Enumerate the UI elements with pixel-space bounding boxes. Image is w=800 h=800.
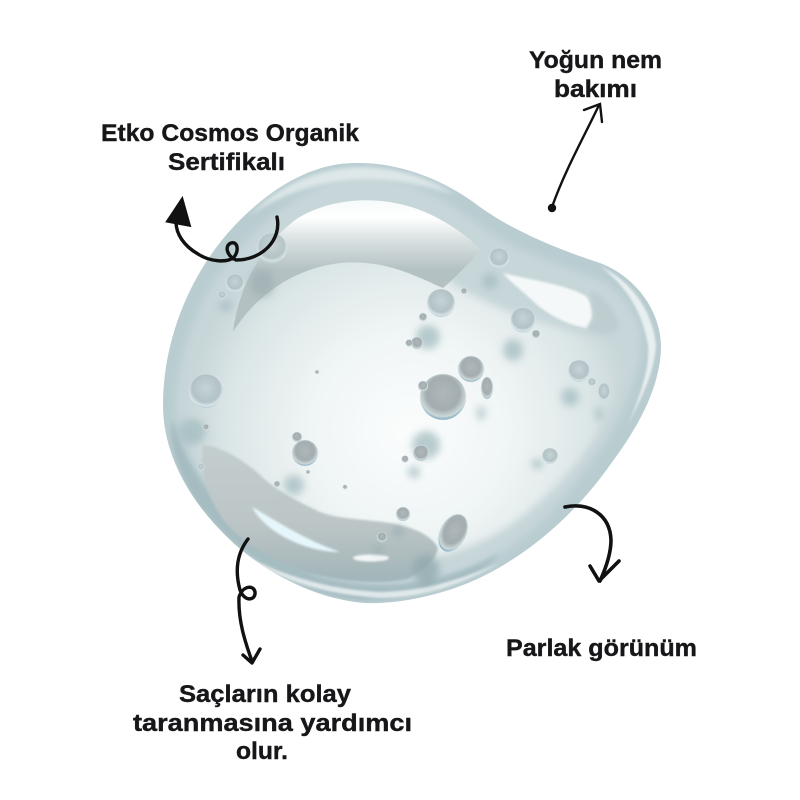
liquid gel blob (163, 163, 661, 603)
pool white highlight (353, 554, 389, 562)
heading: Etko Cosmos Organik Sertifikalı (101, 120, 360, 176)
water droplets (189, 233, 610, 557)
pool cyan highlight (252, 507, 340, 552)
right lens highlight (503, 273, 592, 328)
top rim shine (250, 167, 455, 215)
arrow: to Parlak görünüm (565, 506, 619, 581)
arrow: to Saçların kolay taranmasına (237, 539, 260, 663)
heading: Yoğun nem bakımı: Yoğun nem (529, 47, 662, 74)
blob edge band (176, 176, 641, 584)
heading: Etko Cosmos Organik Sertifikalı: Sertifikalı (168, 149, 285, 176)
blob bright interior (202, 262, 612, 558)
top lens highlight band (233, 200, 481, 332)
bottom pool (202, 445, 438, 582)
lower-left dark band (171, 420, 500, 600)
right rim shade (586, 294, 616, 332)
heading: Etko Cosmos Organik Sertifikalı: Etko Cosmos Organik (101, 120, 360, 147)
heading: Saçların kolay taranmasına yardımcı olur.: olur. (236, 738, 288, 765)
blob outer body (163, 163, 661, 603)
right rim shine (600, 266, 656, 425)
arrow: to certificate label (168, 200, 278, 261)
heading: Saçların kolay taranmasına yardımcı olur.: Saçların kolay (179, 681, 352, 708)
drop shadows (178, 269, 603, 585)
heading: Yoğun nem bakımı (529, 47, 662, 103)
bottom rim shine (254, 560, 494, 599)
heading: Yoğun nem bakımı: bakımı (554, 76, 637, 103)
heading: Saçların kolay taranmasına yardımcı olur. (133, 681, 412, 765)
heading: Parlak görünüm: Parlak görünüm (506, 635, 697, 662)
arrow: to Yoğun nem bakımı (549, 104, 602, 211)
heading: Saçların kolay taranmasına yardımcı olur.: taranmasına yardımcı (133, 710, 412, 737)
